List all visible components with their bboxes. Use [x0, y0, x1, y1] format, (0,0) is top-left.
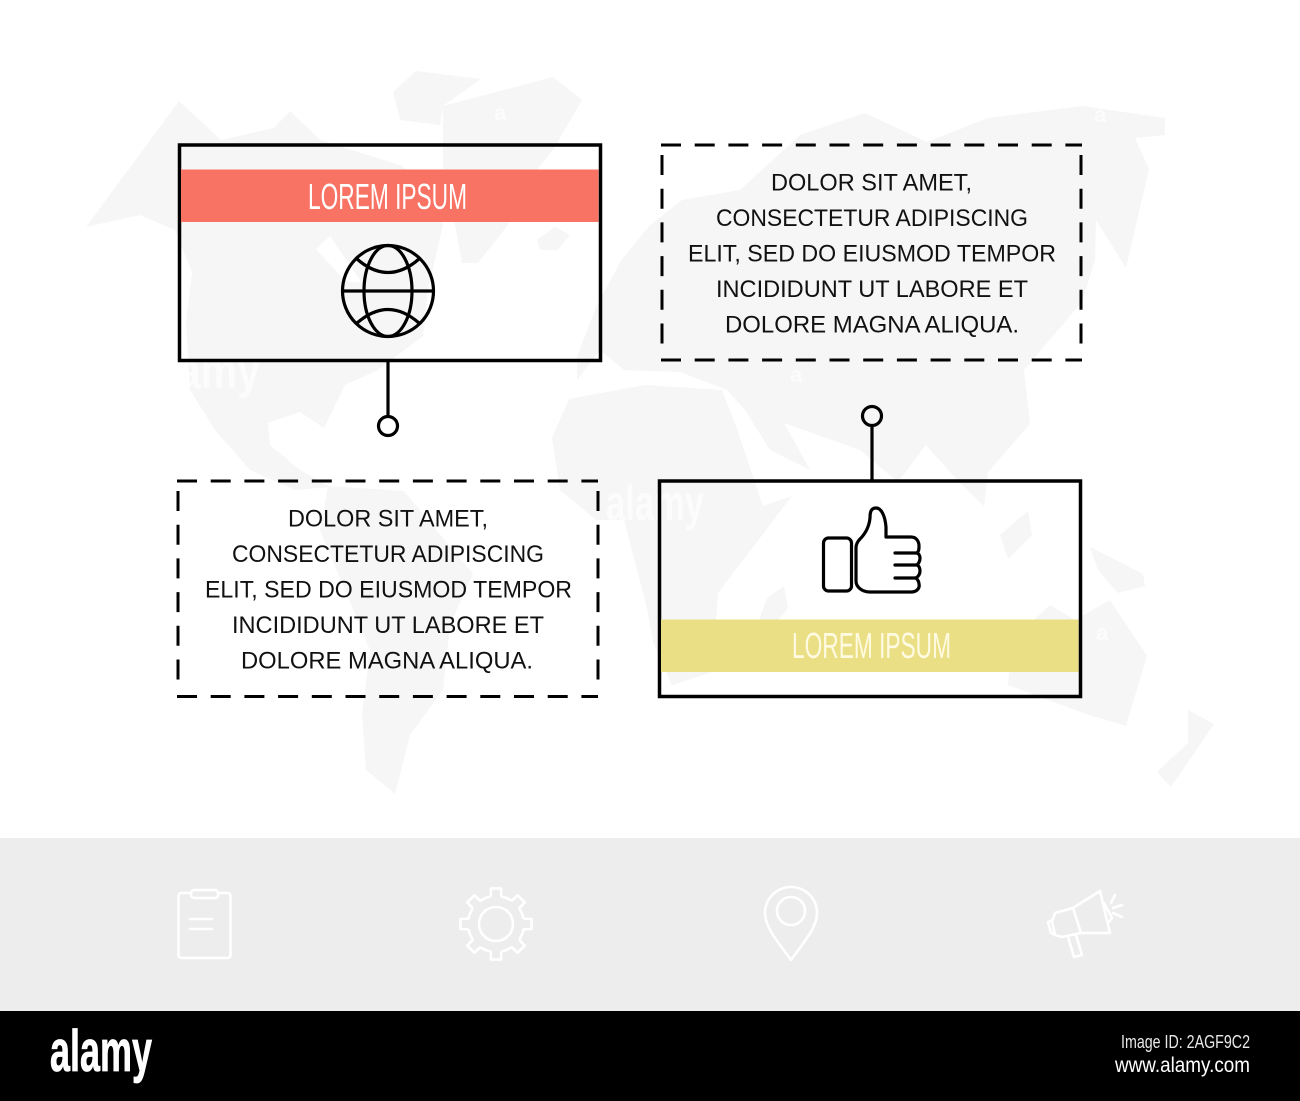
logo text: alamy — [50, 1019, 152, 1084]
text block: DOLOR SIT AMET, — [771, 170, 972, 196]
text block: DOLOR SIT AMET, — [288, 506, 488, 532]
text block: DOLORE MAGNA ALIQUA. — [725, 312, 1019, 338]
heading band: red — [181, 170, 598, 222]
watermark: faint logos over the map — [178, 100, 1109, 645]
text block: DOLORE MAGNA ALIQUA. — [241, 648, 533, 674]
text block: INCIDIDUNT UT LABORE ET — [716, 276, 1028, 303]
dashed frame — [177, 481, 598, 696]
watermark: faint logos over the map: a — [494, 100, 507, 125]
panel: thumbs-up card — [660, 481, 1080, 696]
connector: globe card — [378, 361, 398, 436]
panel: globe card — [180, 145, 600, 360]
watermark: faint logos over the map: a — [790, 362, 803, 387]
text block: CONSECTETUR ADIPISCING — [716, 205, 1028, 232]
card frame — [660, 481, 1080, 696]
text block — [205, 506, 572, 674]
heading band: yellow: LOREM IPSUM — [792, 625, 951, 666]
image id: Image ID: 2AGF9C2 — [1121, 1032, 1250, 1052]
text block: INCIDIDUNT UT LABORE ET — [232, 612, 544, 639]
watermark: faint logos over the map: alamy — [606, 475, 704, 531]
icon: thumbs up — [824, 508, 920, 592]
text block — [688, 170, 1056, 338]
watermark: faint logos over the map: a — [1096, 620, 1109, 645]
icon: megaphone — [1048, 891, 1122, 957]
text block: ELIT, SED DO EIUSMOD TEMPOR — [205, 576, 572, 604]
text block: CONSECTETUR ADIPISCING — [232, 541, 544, 568]
website: www.alamy.com — [1114, 1054, 1250, 1077]
watermark: faint logos over the map: amy — [178, 343, 260, 399]
footer bar — [0, 1011, 1300, 1101]
background world map — [86, 71, 1214, 794]
icon: globe — [342, 246, 434, 336]
icon: clipboard — [178, 890, 230, 958]
heading band: yellow — [661, 620, 1078, 672]
connector: thumbs-up card — [862, 406, 882, 481]
watermark: faint logos over the map: a — [1094, 102, 1107, 127]
panel: dashed text box top right — [661, 145, 1082, 360]
text block: ELIT, SED DO EIUSMOD TEMPOR — [688, 240, 1056, 268]
icon: gear — [460, 888, 532, 960]
panel: dashed text box bottom left — [177, 481, 598, 696]
dashed frame — [661, 145, 1082, 360]
bottom icon band — [0, 838, 1300, 1011]
card frame — [180, 145, 600, 360]
icon: map pin — [765, 887, 817, 960]
heading band: red: LOREM IPSUM — [308, 176, 467, 217]
